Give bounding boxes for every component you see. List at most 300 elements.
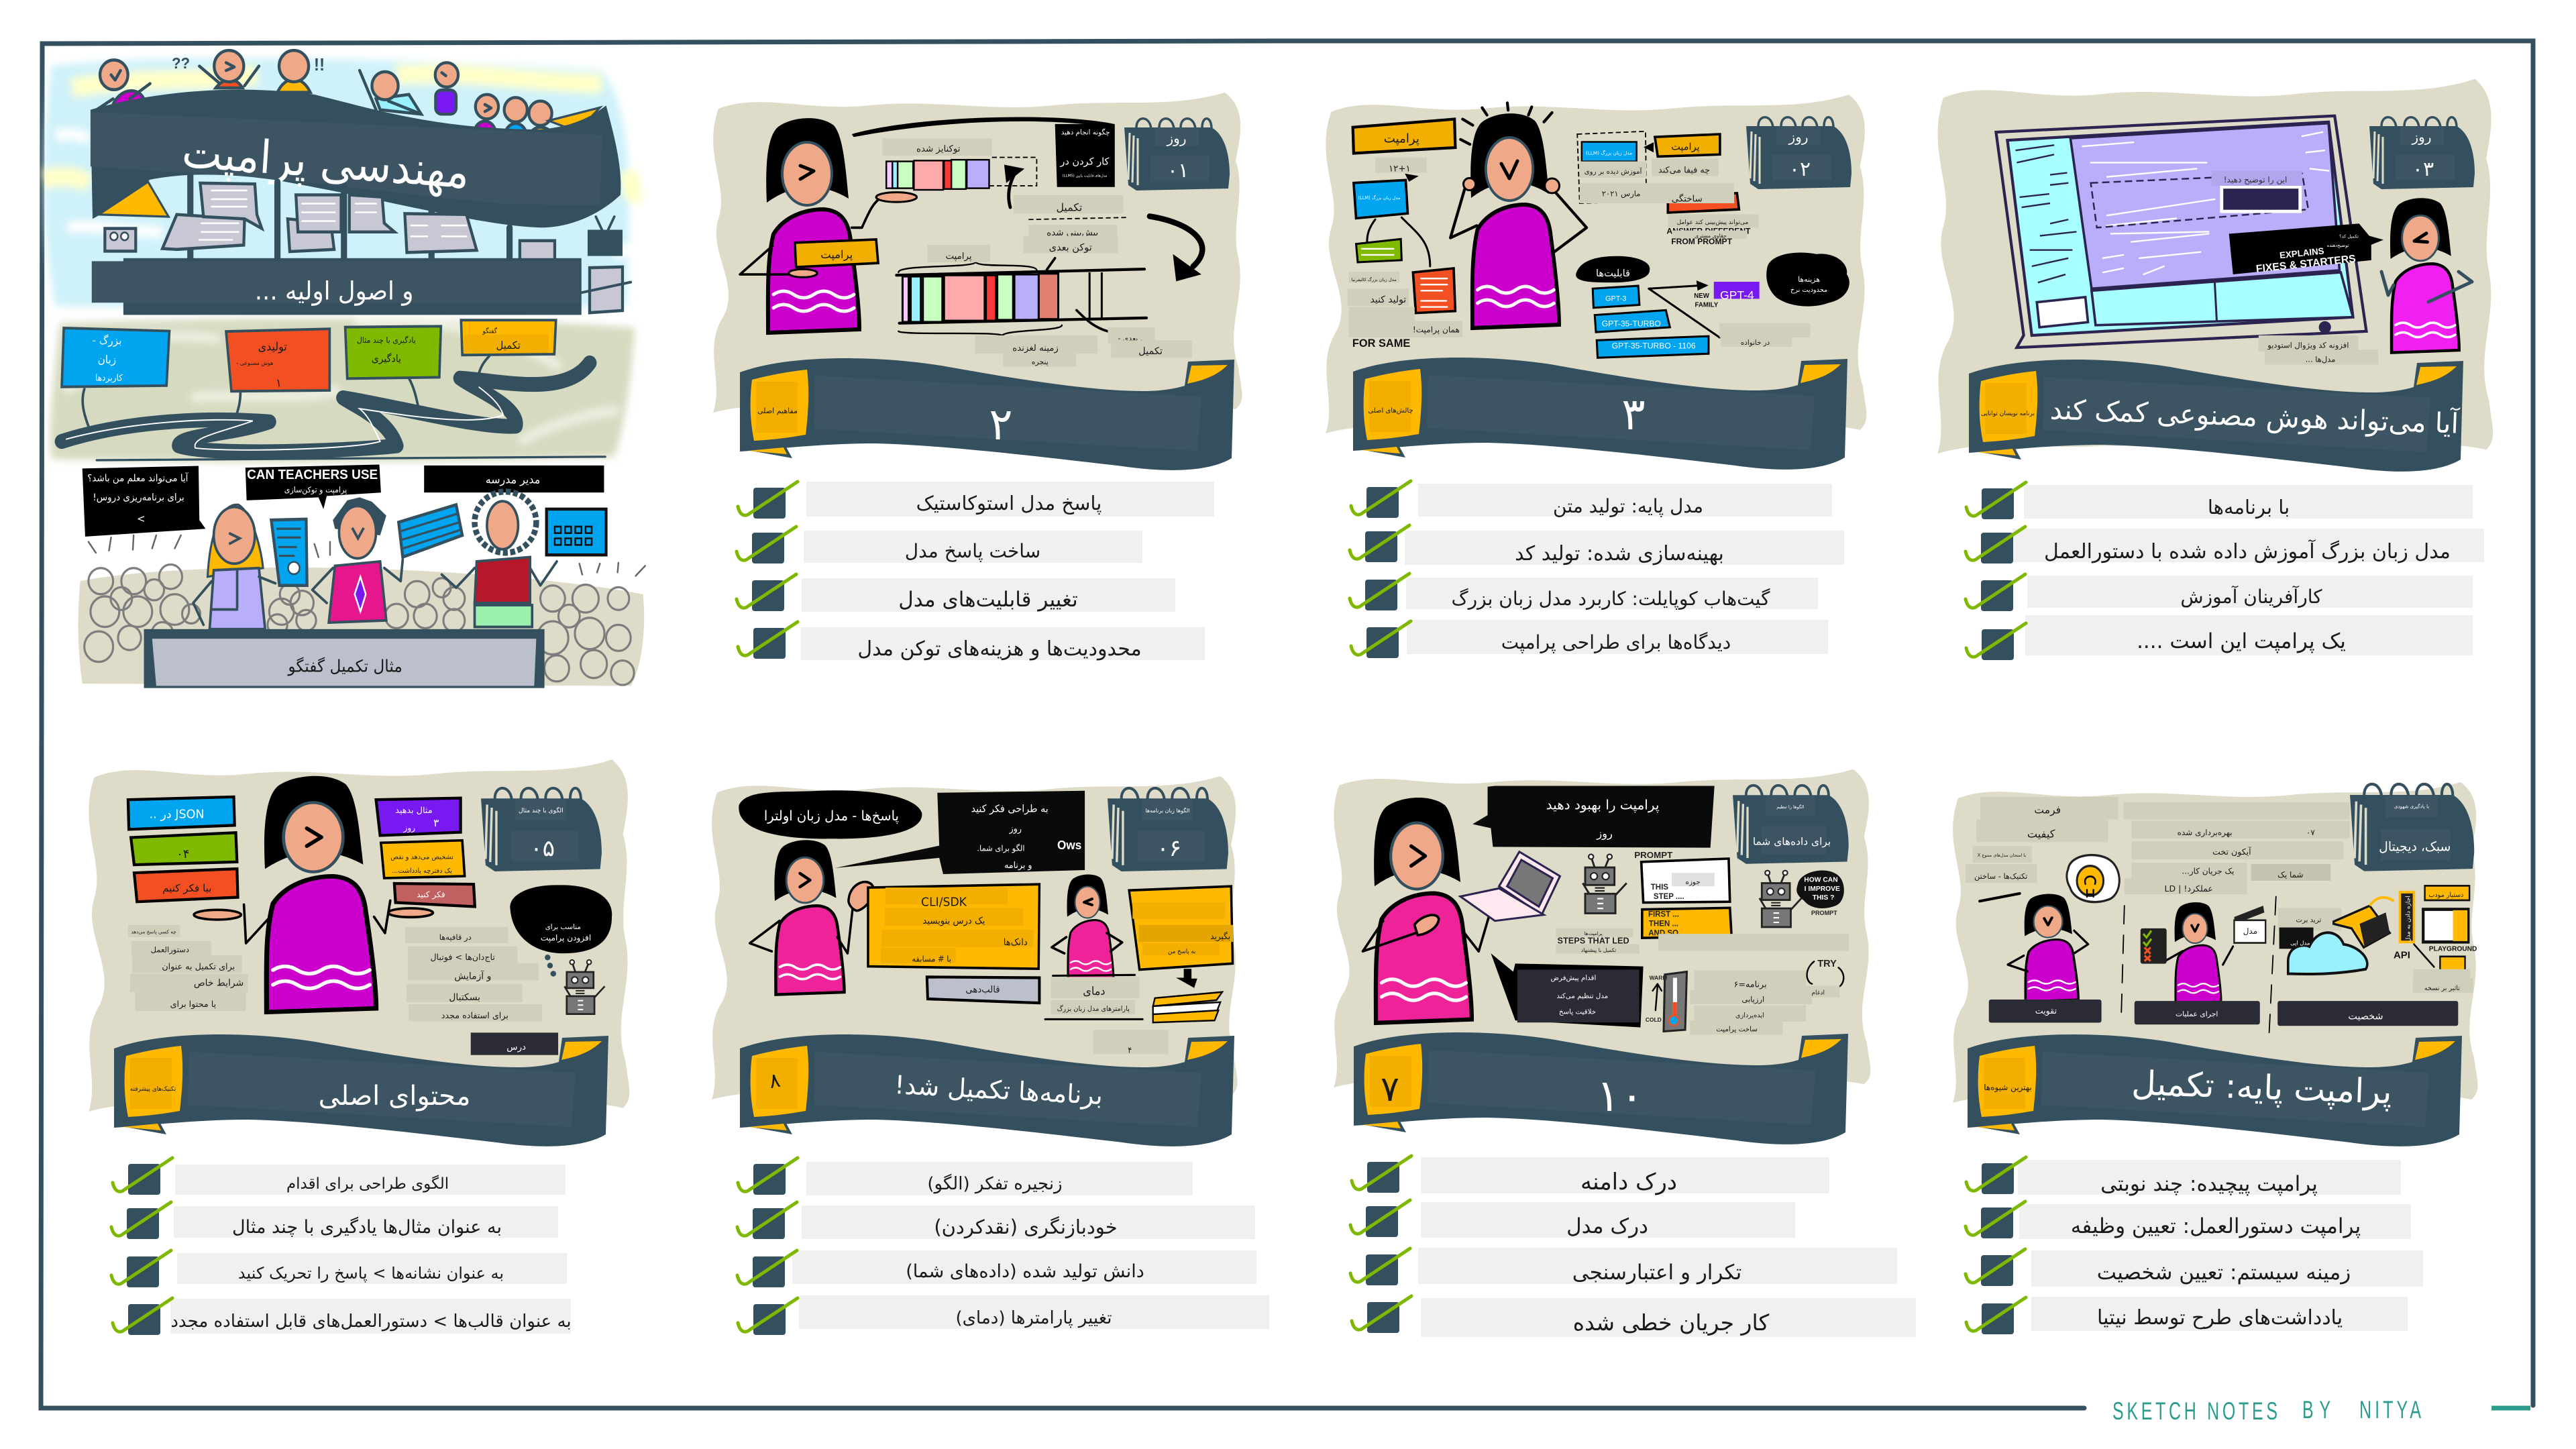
day calendar <box>1108 788 1228 871</box>
speech: completions: EXPLAINS <box>2279 246 2324 260</box>
day calendar: با یادگیری شهودی <box>2394 803 2429 809</box>
person B <box>2175 902 2221 1003</box>
illustration: tokens: تکمیل <box>1056 201 1082 214</box>
speech: can teachers: برای برنامه‌ریزی دروس! <box>93 492 184 503</box>
subtitle bar <box>123 258 582 315</box>
checklist: به عنوان نشانه‌ها > پاسخ را تحریک کنید <box>238 1264 504 1283</box>
credit: sketchnotes by nitya <box>2112 1395 2422 1425</box>
banner: ۸ <box>767 1069 782 1093</box>
cloud: add prompt <box>510 885 612 953</box>
panel background <box>1326 95 1866 433</box>
checklist: پرامپت دستورالعمل: تعیین وظیفه <box>2071 1214 2361 1238</box>
robot <box>564 960 604 1014</box>
notes: temperature <box>1690 971 1812 1034</box>
divider <box>97 457 605 460</box>
left notes <box>128 925 248 1011</box>
panel: lesson 3 models <box>1326 95 1866 658</box>
checklist: کار جریان خطی شده <box>1573 1309 1770 1336</box>
speech: can teachers: آیا می‌تواند معلم من باشد؟ <box>87 472 189 484</box>
tag: notes: یک دفترچه یادداشت... <box>392 867 452 875</box>
banner: مفاهیم اصلی <box>757 407 798 415</box>
dark box: temperature <box>1491 953 1644 1027</box>
illustration labels: با امتحان مدل‌های متنوع X <box>1978 853 2026 858</box>
checklist: مدل زبان بزرگ آموزش داده شده با دستورالعمل <box>2044 539 2451 564</box>
illustration: tokens: توکن بعدی <box>1049 242 1092 253</box>
checklist: یادداشت‌های طرح توسط نیتیا <box>2097 1306 2343 1330</box>
prompt tag: پرامپت <box>820 248 853 262</box>
trained-on group <box>1577 131 1646 203</box>
speech: design <box>835 791 1085 874</box>
cloud: how can <box>1796 870 1844 908</box>
calendar <box>547 509 606 555</box>
illustration: writing <box>739 790 1233 1055</box>
sign: chat completion: تکمیل <box>496 339 521 352</box>
thermometer: WARM <box>1650 975 1667 981</box>
how to do box: کار کردن در <box>1059 156 1110 167</box>
illustration labels: آیکون تخت <box>2212 847 2251 857</box>
quote: steps that led: پرامپت‌ها <box>1584 930 1603 936</box>
speech: completions: توضیح‌دهنده <box>2327 243 2349 248</box>
banner: برنامه نویسان توانایی <box>1981 411 2035 417</box>
speech: improve: پرامپت را بهبود دهید <box>1546 797 1659 814</box>
illustration: title scene: مهندسی پرامپت <box>180 125 471 199</box>
sign: large language <box>62 328 170 387</box>
chips <box>1593 286 1640 308</box>
person A <box>774 840 844 995</box>
cloud: rate limits: محدودیت نرخ <box>1790 286 1827 294</box>
illustration: model families: ANSWER DIFFERENT <box>1666 226 1751 235</box>
sign: large language: زبان <box>98 353 116 367</box>
sign: generative: هوش مصنوعی - <box>236 360 273 366</box>
crowd <box>78 568 644 686</box>
checklist: محدودیت‌ها و هزینه‌های توکن مدل <box>857 637 1142 661</box>
llm box: مدل زبان بزرگ (LLM) <box>1358 195 1401 201</box>
box: take <box>1129 886 1233 969</box>
panel: lesson 6 applications <box>712 776 1269 1335</box>
checklist: پاسخ مدل استوکاستیک <box>916 492 1102 515</box>
illustration: model families: GPT-35-TURBO <box>1602 319 1661 329</box>
checklist <box>737 482 1214 661</box>
tag: notes <box>381 841 465 878</box>
illustration: model families: چه فیفا می‌کند <box>1658 165 1710 175</box>
cloud: capabilities <box>1576 256 1650 282</box>
illustration shapes <box>1966 797 2473 1032</box>
stack of books <box>398 504 462 557</box>
day calendar: ۰۲ <box>1789 158 1811 181</box>
lesson tag <box>471 1032 558 1055</box>
tag: 04: ۰۴ <box>176 847 189 861</box>
box: first then: FIRST ... <box>1648 911 1679 919</box>
illustration labels: تاثیر بر نسخه <box>2424 985 2460 992</box>
day calendar: ۰۶ <box>1157 835 1181 862</box>
illustration: model families: حقاوی مستری <box>1695 233 1727 239</box>
thermometer: COLD <box>1646 1016 1662 1023</box>
speech: can teachers: > <box>137 513 145 525</box>
checklist: پرامپت پیچیده: چند نوبتی <box>2100 1172 2318 1196</box>
sign: few-shot: یادگیری با چند مثال <box>357 335 416 345</box>
box: cli sdk: با # مسابقه <box>912 954 951 963</box>
box: first then <box>1642 908 1731 938</box>
box: cli sdk: CLI/SDK <box>921 896 967 909</box>
illustration: model families: آموزش دیده بر روی <box>1585 167 1643 176</box>
cloud: ultra: پاسخ‌ها - مدل زبان اولترا <box>764 808 899 824</box>
checklist <box>1966 1157 2423 1334</box>
illustration labels: مدل اپی <box>2290 940 2310 947</box>
illustration: code editor: این را توضیح دهید! <box>2224 175 2287 185</box>
illustration: model families: GPT-35-TURBO - 1106 <box>1612 341 1696 350</box>
illustration labels: مدل <box>2243 926 2257 936</box>
right notes <box>405 927 542 1021</box>
sliding window <box>902 272 1102 322</box>
box: this step: THIS <box>1651 883 1668 892</box>
panel: lesson 2 core concepts <box>713 93 1242 661</box>
box: this step: جوزه <box>1686 878 1701 886</box>
sign: generative: تولیدی <box>258 340 287 354</box>
banner: بهترین شیوه‌ها <box>1984 1083 2032 1093</box>
teacher middle <box>313 497 402 623</box>
dark box: temperature: اقدام پیش‌فرض <box>1550 974 1596 982</box>
dark box: temperature: مدل تنظیم می‌کند <box>1556 992 1608 1000</box>
illustration: iterate: ادغام <box>1811 989 1825 996</box>
checklist: تغییر پارامترها (دمای) <box>955 1308 1112 1328</box>
illustration: tokens: . بعدی - <box>1118 334 1142 343</box>
day calendar: ۰۱ <box>1167 159 1189 182</box>
panel background <box>1953 782 2478 1103</box>
illustration: model families: در خانواده <box>1741 339 1770 347</box>
box: first then: THEN ... <box>1649 920 1678 928</box>
speech: design: روز <box>1009 824 1022 834</box>
right notes: برای استفاده مجدد <box>441 1010 508 1021</box>
illustration labels: اجرای عملیات <box>2176 1010 2218 1018</box>
panel background <box>713 93 1242 413</box>
day calendar <box>2350 784 2474 871</box>
road <box>62 363 590 451</box>
cloud: how can: I IMPROVE <box>1805 885 1840 893</box>
checklist: یک پرامپت این است .... <box>2137 629 2346 653</box>
box: take: بگیرید <box>1210 931 1230 942</box>
panel: course title <box>43 50 645 688</box>
temperature note: پارامترهای مدل زبان بزرگ <box>1057 1004 1130 1013</box>
how to do box: مدل‌های قابلیت پایین (LLMS) <box>1062 174 1108 178</box>
panel background <box>89 759 629 1112</box>
checklist: زنجیره تفکر (الگو) <box>927 1173 1063 1194</box>
teacher right <box>442 492 557 627</box>
illustration labels: شخصیت <box>2348 1012 2383 1022</box>
illustration: model families: مدل زبان بزرگ (LLM) <box>1586 149 1632 156</box>
robots <box>105 229 136 251</box>
checklist: مدل پایه: تولید متن <box>1553 495 1703 517</box>
person A <box>2025 894 2078 1001</box>
day calendar: الگوی با چند مثال <box>519 806 564 814</box>
robot <box>1760 871 1802 927</box>
illustration: model families: مارس ۲۰۲۱ <box>1602 189 1640 199</box>
illustration: code editor: مدل‌ها ... <box>2306 354 2335 364</box>
cloud: how can: THIS ? <box>1813 894 1834 902</box>
illustration labels: شما یک <box>2277 870 2304 879</box>
speech: prompting: پرامپت و توکن‌سازی <box>284 485 347 495</box>
tag: json <box>128 797 235 829</box>
speech: design: Ows <box>1057 839 1081 852</box>
chips: GPT-3 <box>1605 294 1626 303</box>
left notes: شرایط خاص <box>194 978 244 989</box>
speech: principal <box>424 466 604 492</box>
dark box: temperature: خلاقیت پاسخ <box>1559 1008 1596 1016</box>
panel: lesson 4 coding <box>1937 79 2493 660</box>
tag: think <box>134 869 238 902</box>
gesture arms <box>2381 272 2472 302</box>
sign: large language: کاربردها <box>95 372 123 384</box>
illustration: model families: FAMILY <box>1695 302 1719 309</box>
box: first then: AND SO ... <box>1648 930 1687 938</box>
left notes: برای تکمیل به عنوان <box>162 961 235 972</box>
illustration: title scene: !! <box>314 55 325 74</box>
credit: sketchnotes by nitya: BY <box>2302 1395 2330 1424</box>
person <box>1470 113 1559 328</box>
illustration: code editor: افزونه کد ویژوال استودیو <box>2267 341 2349 351</box>
checklist: تکرار و اعتبارسنجی <box>1572 1260 1741 1285</box>
title banner <box>91 90 621 227</box>
tag: example: مثال بدهید <box>395 805 433 815</box>
sign: few-shot <box>345 326 441 378</box>
tag: notes: تشخیص می‌دهد و نقص <box>390 854 453 861</box>
checklist: الگوی طراحی برای اقدام <box>286 1175 449 1193</box>
notes: temperature: ساخت پرامپت <box>1716 1026 1758 1034</box>
person <box>264 776 376 1012</box>
illustration: model families: GPT-4 <box>1720 288 1754 302</box>
banner: برنامه‌ها تکمیل شد! <box>894 1070 1104 1111</box>
speech: completions: تکمیل کد؟ <box>2339 234 2359 239</box>
checklist: زمینه سیستم: تعیین شخصیت <box>2097 1260 2351 1285</box>
day calendar: سبک، دیجیتال <box>2379 839 2451 854</box>
checklist <box>737 1158 1269 1335</box>
checklist: کارآفرینان آموزش <box>2180 586 2322 608</box>
day calendar: برای داده‌های شما <box>1753 835 1831 847</box>
speech bubbles <box>162 183 477 252</box>
banner: تکنیک‌های پیشرفته <box>130 1086 176 1093</box>
illustration: prompt elements <box>128 797 612 1055</box>
banner: پرامپت پایه: تکمیل <box>2131 1063 2393 1112</box>
checklist: درک دامنه <box>1580 1169 1677 1195</box>
right notes: تاج‌دان‌ها > فوتبال <box>430 952 495 963</box>
checklist: به عنوان مثال‌ها یادگیری با چند مثال <box>232 1216 502 1238</box>
speech: design: به طراحی فکر کنید <box>971 803 1049 814</box>
cloud: how can: HOW CAN <box>1804 877 1838 884</box>
illustration: model families: ساختگی <box>1672 194 1703 205</box>
checklist: دانش تولید شده (داده‌های شما) <box>906 1261 1144 1282</box>
checklist <box>1966 482 2484 660</box>
box: cli sdk: یک درس بنویسید <box>922 916 985 926</box>
illustration: iterate: TRY <box>1817 959 1837 969</box>
illustration: model families: مدل زبان بزرگ کالیفرنیا <box>1352 277 1397 282</box>
tag: example: روز <box>402 823 415 833</box>
quote: steps that led: تکمیل با پیشنهاد <box>1581 947 1616 953</box>
banner <box>114 1034 608 1146</box>
prompt tag <box>1353 119 1455 153</box>
illustration labels: اجازه دادن به مدل <box>2405 896 2412 942</box>
illustration labels: تکنیک‌ها - ساختن <box>1974 871 2027 881</box>
speech: can teachers <box>83 466 205 537</box>
illustration labels: دستیار مودب <box>2428 892 2463 899</box>
cloud: ultra <box>739 790 922 839</box>
diploma <box>271 519 307 586</box>
speech: completions <box>2229 223 2383 275</box>
person <box>766 118 859 333</box>
panel background <box>1937 79 2493 453</box>
day calendar <box>1733 786 1849 864</box>
illustration: title scene: ?? <box>172 54 190 72</box>
illustration labels: عملکرد! | LD <box>2164 883 2213 894</box>
illustration: model families: پرامپت <box>1671 142 1700 153</box>
box: take: به پاسخ من <box>1168 949 1195 955</box>
prompt tag <box>795 239 878 267</box>
person <box>1374 798 1472 1023</box>
illustration labels <box>1974 804 2477 1022</box>
person <box>2390 198 2459 353</box>
panel: lesson 5 templates <box>89 759 629 1335</box>
illustration: tokens <box>740 117 1202 367</box>
illustration: code editor <box>1996 116 2383 365</box>
checklist: بهینه‌سازی شده: تولید کد <box>1515 542 1724 566</box>
illustration: title scene <box>43 50 645 688</box>
day calendar <box>2369 117 2475 189</box>
checklist: دیدگاه‌ها برای طراحی پرامپت <box>1501 631 1731 653</box>
day calendar: ۰۳ <box>2412 158 2434 181</box>
banner <box>740 1034 1234 1146</box>
day calendar <box>481 788 602 871</box>
checklist: درک مدل <box>1566 1214 1648 1238</box>
banner: ۷ <box>1381 1069 1399 1110</box>
illustration labels: PLAYGROUND <box>2429 946 2477 953</box>
illustration: model families <box>1348 103 1849 358</box>
thermometer <box>1646 971 1686 1032</box>
laptop <box>1460 852 1560 921</box>
day calendar: الگوها را تنظیم <box>1776 804 1805 810</box>
banner <box>1353 358 1847 470</box>
how to do box <box>1055 124 1115 187</box>
right notes: بسکتبال <box>449 992 480 1003</box>
illustration: iterate: PROMPT <box>1811 910 1837 916</box>
poles <box>191 175 510 258</box>
person B <box>1067 875 1114 982</box>
checklist: خودبازنگری (نقدکردن) <box>934 1216 1118 1238</box>
notes: temperature: ایده‌پردازی <box>1735 1012 1764 1019</box>
sign: generative <box>226 329 329 391</box>
day calendar: روز <box>1167 130 1186 146</box>
sign: chat completion <box>461 320 556 355</box>
day calendar: روز <box>1788 129 1808 145</box>
checklist: با برنامه‌ها <box>2208 496 2290 519</box>
illustration: model families: همان پرامپت! <box>1413 325 1460 335</box>
tag: example: ۳ <box>433 816 439 829</box>
illustration labels: فرمت <box>2034 804 2061 817</box>
illustration: model families: تولید کنید <box>1371 294 1406 305</box>
speech: design: الگو برای شما. <box>977 843 1025 854</box>
box: this step <box>1634 850 1730 902</box>
people on the banner <box>100 50 553 133</box>
panel background <box>1334 769 1870 1087</box>
left notes: چه کسی پاسخ می‌دهد <box>131 928 176 934</box>
illustration labels: تقویت <box>2035 1006 2057 1016</box>
day calendar: الگوها زبان برنامه‌ها <box>1145 807 1189 814</box>
tag: example <box>376 798 461 835</box>
banner <box>740 358 1234 470</box>
box: formatting: قالب‌دهی <box>965 984 1000 995</box>
illustration: model families: FROM PROMPT <box>1671 237 1733 246</box>
illustration: model families: FOR SAME <box>1352 337 1410 350</box>
illustration: tokens: پیش‌بینی شده <box>1046 228 1099 238</box>
sign: few-shot: یادگیری <box>372 353 401 365</box>
banner: چالش‌های اصلی <box>1368 407 1413 415</box>
tag: think: بیا فکر کنیم <box>162 882 211 894</box>
illustration: model families: ۱۲+۱ <box>1389 164 1411 174</box>
illustration labels: یک جریان کار... <box>2182 867 2235 877</box>
speech: improve: روز <box>1596 827 1613 841</box>
speech: completions: FIXES & STARTERS <box>2255 253 2357 275</box>
stack of papers <box>1153 992 1222 1022</box>
illustration: model families: می‌تواند پیش‌بینی کند عوامل <box>1677 219 1748 226</box>
illustration: tokens: زمینه لغزنده <box>1012 343 1059 354</box>
day calendar <box>1746 117 1851 189</box>
day calendar <box>1124 119 1230 191</box>
cloud: capabilities: قابلیت‌ها <box>1596 268 1630 279</box>
banner: ۳ <box>1621 388 1646 440</box>
left notes: دستورالعمل <box>151 945 189 955</box>
day calendar: روز <box>2412 129 2431 145</box>
sign: chat completion: گفتگو <box>482 327 497 335</box>
credit: sketchnotes by nitya: SKETCH NOTES <box>2112 1397 2277 1425</box>
illustration labels: ترید برت <box>2296 917 2321 924</box>
quote: steps that led: STEPS THAT LED <box>1558 936 1629 946</box>
teacher left <box>193 504 276 629</box>
token bar <box>886 160 989 190</box>
illustration: writing: ۴ <box>1128 1045 1132 1055</box>
box: this step: STEP .... <box>1654 893 1684 901</box>
temperature note <box>1045 975 1142 1019</box>
notes: temperature: ارزیابی <box>1741 994 1764 1004</box>
illustration: tokens: توکنایز شده <box>916 144 961 154</box>
tag: think about <box>394 883 475 906</box>
left notes: یا محتوا برای <box>170 999 217 1010</box>
speech: prompting <box>246 465 381 509</box>
banner <box>1968 1034 2462 1146</box>
podium <box>144 629 545 688</box>
box: cli sdk: دانک‌ها <box>1004 937 1028 948</box>
illustration labels: API <box>2394 950 2410 961</box>
sign: generative: ۱ <box>276 376 282 390</box>
speech: prompting: CAN TEACHERS USE <box>247 468 378 482</box>
banner <box>1354 1032 1848 1144</box>
tag: 04 <box>131 833 237 865</box>
illustration: tokens: پرامپت <box>946 252 972 262</box>
cloud: add prompt: مناسب برای <box>545 923 581 931</box>
panel: lesson 8 best practices <box>1953 782 2478 1334</box>
quote: steps that led <box>1556 928 1640 954</box>
checklist: به عنوان قالب‌ها > دستورالعمل‌های قابل استفاده مجدد <box>170 1311 572 1332</box>
checklist <box>111 1158 572 1335</box>
temperature note: دمای <box>1083 985 1106 998</box>
illustration: tokens: پنجره <box>1032 358 1049 366</box>
banner: ۲ <box>989 398 1013 450</box>
cloud: rate limits: هزینه‌ها <box>1798 275 1820 284</box>
speech: improve <box>1472 786 1715 848</box>
banner: ۱۰ <box>1597 1070 1644 1122</box>
checklist <box>1350 1156 1916 1337</box>
notes: temperature: برنامه=۶ <box>1733 979 1767 989</box>
speech: design: و برنامه <box>1004 861 1032 871</box>
checklist <box>1350 481 1844 658</box>
checklist: ساخت پاسخ مدل <box>905 540 1040 562</box>
panel background <box>712 776 1238 1099</box>
